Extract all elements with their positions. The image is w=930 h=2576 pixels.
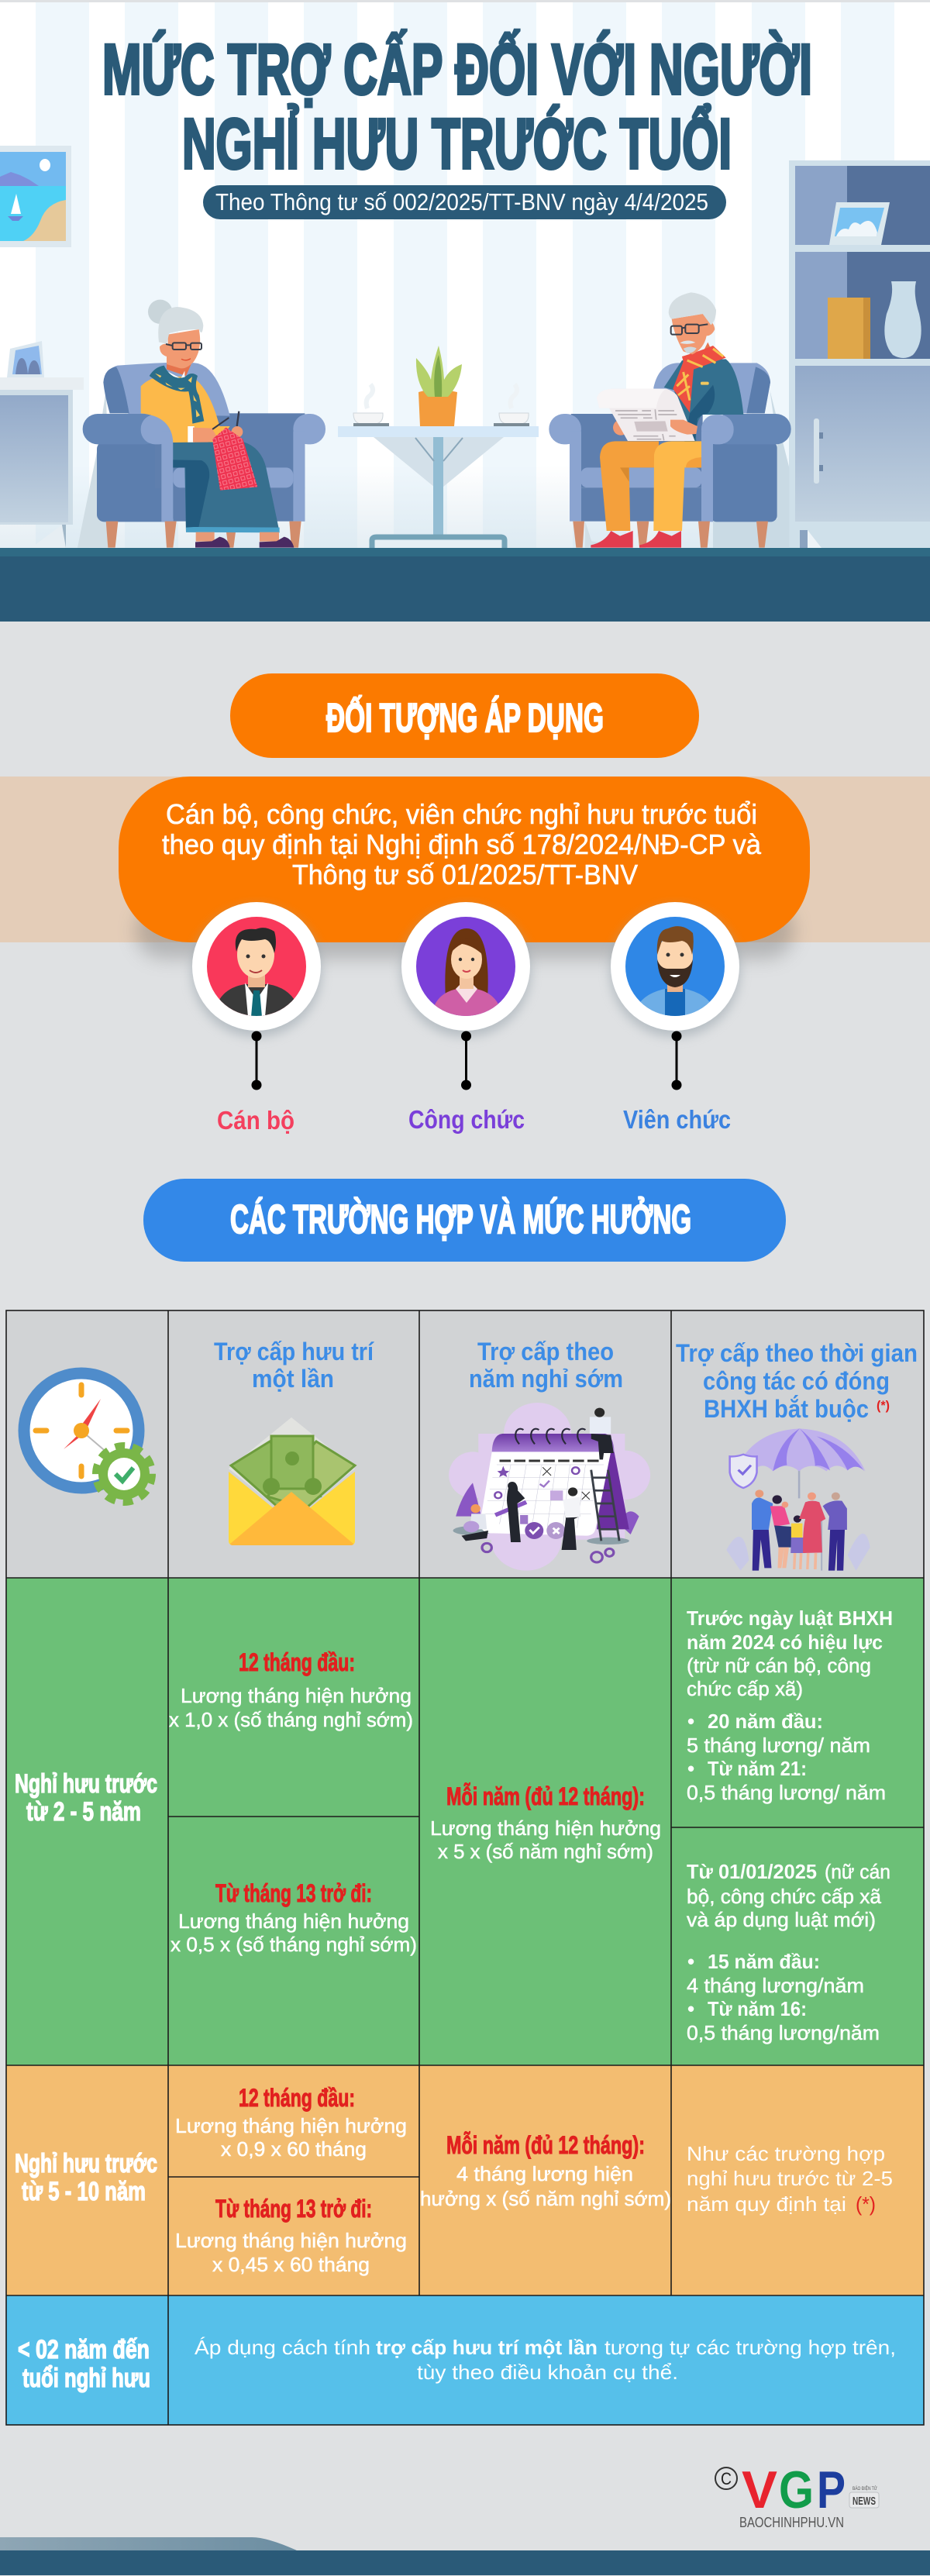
cell: 12 tháng đầu, 5-10 năm: Lương tháng hiện hưởng bbox=[175, 2114, 407, 2137]
cell: từ 01/01/2025: Từ 01/01/2025 bbox=[687, 1860, 817, 1883]
cell: mỗi năm, 2-5 năm: Mỗi năm (đủ 12 tháng): bbox=[446, 1782, 645, 1810]
cell: từ tháng 13, 5-10 năm: x 0,45 x 60 tháng bbox=[212, 2253, 370, 2276]
cell: mỗi năm, 5-10 năm: Mỗi năm (đủ 12 tháng): bbox=[446, 2131, 645, 2159]
column header: trợ cấp theo thời gian: (*) bbox=[877, 1398, 890, 1413]
column header: trợ cấp theo năm nghỉ sớm: năm nghỉ sớm bbox=[469, 1365, 623, 1393]
cell: trước ngày luật BHXH có hiệu lực: (trừ nữ cán bộ, công bbox=[687, 1654, 871, 1677]
wall picture: seaside bbox=[0, 146, 71, 247]
row label: 5 - 10 năm: từ 5 - 10 năm bbox=[22, 2177, 146, 2206]
cell: như các trường hợp bbox=[687, 2142, 893, 2216]
coffee table with plant and cups bbox=[338, 346, 539, 548]
cell: mỗi năm, 5-10 năm bbox=[420, 2131, 671, 2210]
cell: từ 01/01/2025 bbox=[687, 1860, 890, 2044]
panel: applicable subjects bbox=[0, 777, 930, 959]
cell: trước ngày luật BHXH có hiệu lực: 0,5 tháng lương/ năm bbox=[687, 1781, 886, 1804]
icon: envelope with money bbox=[229, 1417, 355, 1545]
left cabinet with photo bbox=[0, 341, 84, 548]
cell: áp dụng cách tính: tương tự các trường hợp trên, bbox=[604, 2336, 896, 2359]
cell: từ tháng 13, 5-10 năm bbox=[175, 2195, 407, 2276]
row label: dưới 02 năm: tuổi nghỉ hưu bbox=[22, 2364, 150, 2393]
cell: từ tháng 13, 2-5 năm: x 0,5 x (số tháng nghỉ sớm) bbox=[170, 1933, 417, 1956]
cell: từ 01/01/2025: 0,5 tháng lương/năm bbox=[687, 2021, 880, 2044]
title bbox=[102, 29, 812, 184]
cell: như các trường hợp: Như các trường hợp bbox=[687, 2142, 885, 2165]
cell: từ 01/01/2025: 15 năm đầu: bbox=[708, 1950, 820, 1973]
label: cán bộ: Cán bộ bbox=[217, 1106, 294, 1135]
column header: trợ cấp theo thời gian: công tác có đóng bbox=[703, 1367, 890, 1395]
heading: các trường hợp và mức hưởng bbox=[143, 1179, 786, 1262]
cell: áp dụng cách tính: Áp dụng cách tính bbox=[195, 2336, 370, 2359]
row label: 2 - 5 năm: Nghỉ hưu trước bbox=[15, 1769, 157, 1799]
cell: từ 01/01/2025: 4 tháng lương/năm bbox=[687, 1974, 864, 1997]
cell: trước ngày luật BHXH có hiệu lực: • bbox=[687, 1710, 694, 1733]
cell: 12 tháng đầu, 5-10 năm bbox=[175, 2084, 407, 2161]
row label: 2 - 5 năm bbox=[15, 1769, 157, 1827]
cell: trước ngày luật BHXH có hiệu lực: năm 2024 có hiệu lực bbox=[687, 1631, 883, 1654]
row label: 5 - 10 năm bbox=[15, 2149, 157, 2206]
table backgrounds bbox=[6, 1310, 924, 2425]
cell: áp dụng cách tính: tùy theo điều khoản cụ thể. bbox=[417, 2361, 678, 2384]
icon: family under umbrella bbox=[726, 1428, 870, 1571]
cell: trước ngày luật BHXH có hiệu lực: • bbox=[687, 1757, 694, 1780]
cell: 12 tháng đầu, 5-10 năm: 12 tháng đầu: bbox=[239, 2084, 355, 2112]
avatar: công chức bbox=[401, 902, 531, 1037]
cell: mỗi năm, 5-10 năm: 4 tháng lương hiện bbox=[456, 2162, 633, 2185]
cell: mỗi năm, 2-5 năm: Lương tháng hiện hưởng bbox=[430, 1817, 661, 1840]
column header: trợ cấp hưu trí một lần: Trợ cấp hưu trí bbox=[214, 1338, 374, 1365]
label: viên chức: Viên chức bbox=[623, 1105, 731, 1134]
cell: áp dụng cách tính bbox=[195, 2336, 896, 2384]
avatar: cán bộ bbox=[191, 902, 322, 1037]
cell: từ tháng 13, 5-10 năm: Lương tháng hiện hưởng bbox=[175, 2229, 407, 2252]
cell: trước ngày luật BHXH có hiệu lực: Trước ngày luật BHXH bbox=[687, 1607, 893, 1630]
cell: mỗi năm, 5-10 năm: hưởng x (số năm nghỉ sớm) bbox=[420, 2187, 671, 2210]
hero illustration: living room bbox=[0, 2, 930, 622]
cell: như các trường hợp: (*) bbox=[856, 2192, 876, 2216]
cell: từ 01/01/2025: (nữ cán bbox=[825, 1860, 890, 1883]
cell: từ tháng 13, 2-5 năm: Lương tháng hiện hưởng bbox=[178, 1910, 409, 1933]
connector: viên chức bbox=[671, 1031, 682, 1090]
cell: từ tháng 13, 2-5 năm: Từ tháng 13 trở đi: bbox=[215, 1879, 372, 1907]
cell: như các trường hợp: năm quy định tại bbox=[687, 2192, 846, 2216]
column header: trợ cấp theo thời gian bbox=[676, 1339, 918, 1423]
panel: applicable subjects: Thông tư số 01/2025/TT-BNV bbox=[292, 859, 638, 890]
logo: VGP news bbox=[715, 2461, 879, 2530]
logo: VGP news: V bbox=[742, 2461, 777, 2519]
logo: VGP news: G bbox=[779, 2461, 814, 2519]
column header: trợ cấp theo năm nghỉ sớm: Trợ cấp theo bbox=[477, 1338, 614, 1365]
woman knitting in armchair bbox=[78, 300, 326, 548]
cell: từ 01/01/2025: • bbox=[687, 1950, 694, 1973]
footer bar bbox=[0, 2537, 930, 2575]
cell: trước ngày luật BHXH có hiệu lực bbox=[687, 1607, 893, 1804]
panel: applicable subjects: theo quy định tại Nghị định số 178/2024/NĐ-CP và bbox=[162, 828, 762, 860]
subtitle pill: Theo Thông tư số 002/2025/TT-BNV ngày 4/4/2025 bbox=[215, 188, 708, 215]
cell: mỗi năm, 2-5 năm: x 5 x (số năm nghỉ sớm) bbox=[438, 1840, 653, 1863]
row label: 2 - 5 năm: từ 2 - 5 năm bbox=[26, 1797, 141, 1827]
cell: 12 tháng đầu, 5-10 năm: x 0,9 x 60 tháng bbox=[221, 2137, 367, 2161]
row label: 5 - 10 năm: Nghỉ hưu trước bbox=[15, 2149, 157, 2178]
logo: VGP news: BAOCHINHPHU.VN bbox=[739, 2515, 844, 2530]
icon: clock with gear bbox=[24, 1373, 150, 1500]
cell: trước ngày luật BHXH có hiệu lực: chức cấp xã) bbox=[687, 1677, 803, 1700]
column header: trợ cấp hưu trí một lần: một lần bbox=[252, 1365, 334, 1393]
row label: dưới 02 năm bbox=[18, 2335, 150, 2393]
cell: như các trường hợp: nghỉ hưu trước từ 2-5 bbox=[687, 2167, 893, 2190]
cell: từ tháng 13, 5-10 năm: Từ tháng 13 trở đi: bbox=[215, 2195, 372, 2223]
cell: từ 01/01/2025: và áp dụng luật mới) bbox=[687, 1908, 876, 1931]
cell: từ 01/01/2025: Từ năm 16: bbox=[708, 1997, 807, 2020]
logo: VGP news: NEWS bbox=[852, 2495, 876, 2508]
row label: dưới 02 năm: < 02 năm đến bbox=[18, 2335, 150, 2364]
man reading newspaper in armchair bbox=[549, 292, 791, 548]
panel: applicable subjects: Cán bộ, công chức, viên chức nghỉ hưu trước tuổi bbox=[166, 798, 757, 830]
column header: trợ cấp hưu trí một lần bbox=[214, 1338, 374, 1393]
logo: VGP news: C bbox=[721, 2469, 732, 2488]
heading: đối tượng áp dụng bbox=[230, 673, 699, 758]
cell: trước ngày luật BHXH có hiệu lực: 20 năm đầu: bbox=[708, 1710, 823, 1733]
cell: từ tháng 13, 2-5 năm bbox=[170, 1879, 417, 1956]
column header: trợ cấp theo năm nghỉ sớm bbox=[469, 1338, 623, 1393]
cell: 12 tháng đầu, 2-5 năm bbox=[169, 1648, 413, 1731]
logo: VGP news: BÁO ĐIỆN TỬ bbox=[852, 2485, 877, 2492]
right shelf bbox=[789, 160, 930, 548]
floor bbox=[0, 548, 930, 622]
cell: áp dụng cách tính: trợ cấp hưu trí một lần bbox=[376, 2336, 598, 2359]
cell: từ 01/01/2025: bộ, công chức cấp xã bbox=[687, 1885, 882, 1908]
cell: 12 tháng đầu, 2-5 năm: Lương tháng hiện hưởng bbox=[181, 1684, 412, 1707]
avatar: viên chức bbox=[610, 902, 740, 1037]
label: công chức: Công chức bbox=[408, 1105, 525, 1134]
cell: trước ngày luật BHXH có hiệu lực: 5 tháng lương/ năm bbox=[687, 1734, 870, 1757]
cell: trước ngày luật BHXH có hiệu lực: Từ năm 21: bbox=[708, 1757, 807, 1780]
heading: đối tượng áp dụng: ĐỐI TƯỢNG ÁP DỤNG bbox=[326, 695, 604, 741]
cell: 12 tháng đầu, 2-5 năm: 12 tháng đầu: bbox=[239, 1648, 355, 1676]
column header: trợ cấp theo thời gian: BHXH bắt buộc bbox=[704, 1395, 869, 1423]
cell: mỗi năm, 2-5 năm bbox=[430, 1782, 661, 1863]
cell: 12 tháng đầu, 2-5 năm: x 1,0 x (số tháng nghỉ sớm) bbox=[169, 1708, 413, 1731]
connector: cán bộ bbox=[251, 1031, 262, 1090]
connector: công chức bbox=[461, 1031, 471, 1090]
icon: calendar team illustration bbox=[449, 1403, 650, 1571]
logo: VGP news: P bbox=[817, 2461, 846, 2519]
cell: từ 01/01/2025: • bbox=[687, 1997, 694, 2020]
